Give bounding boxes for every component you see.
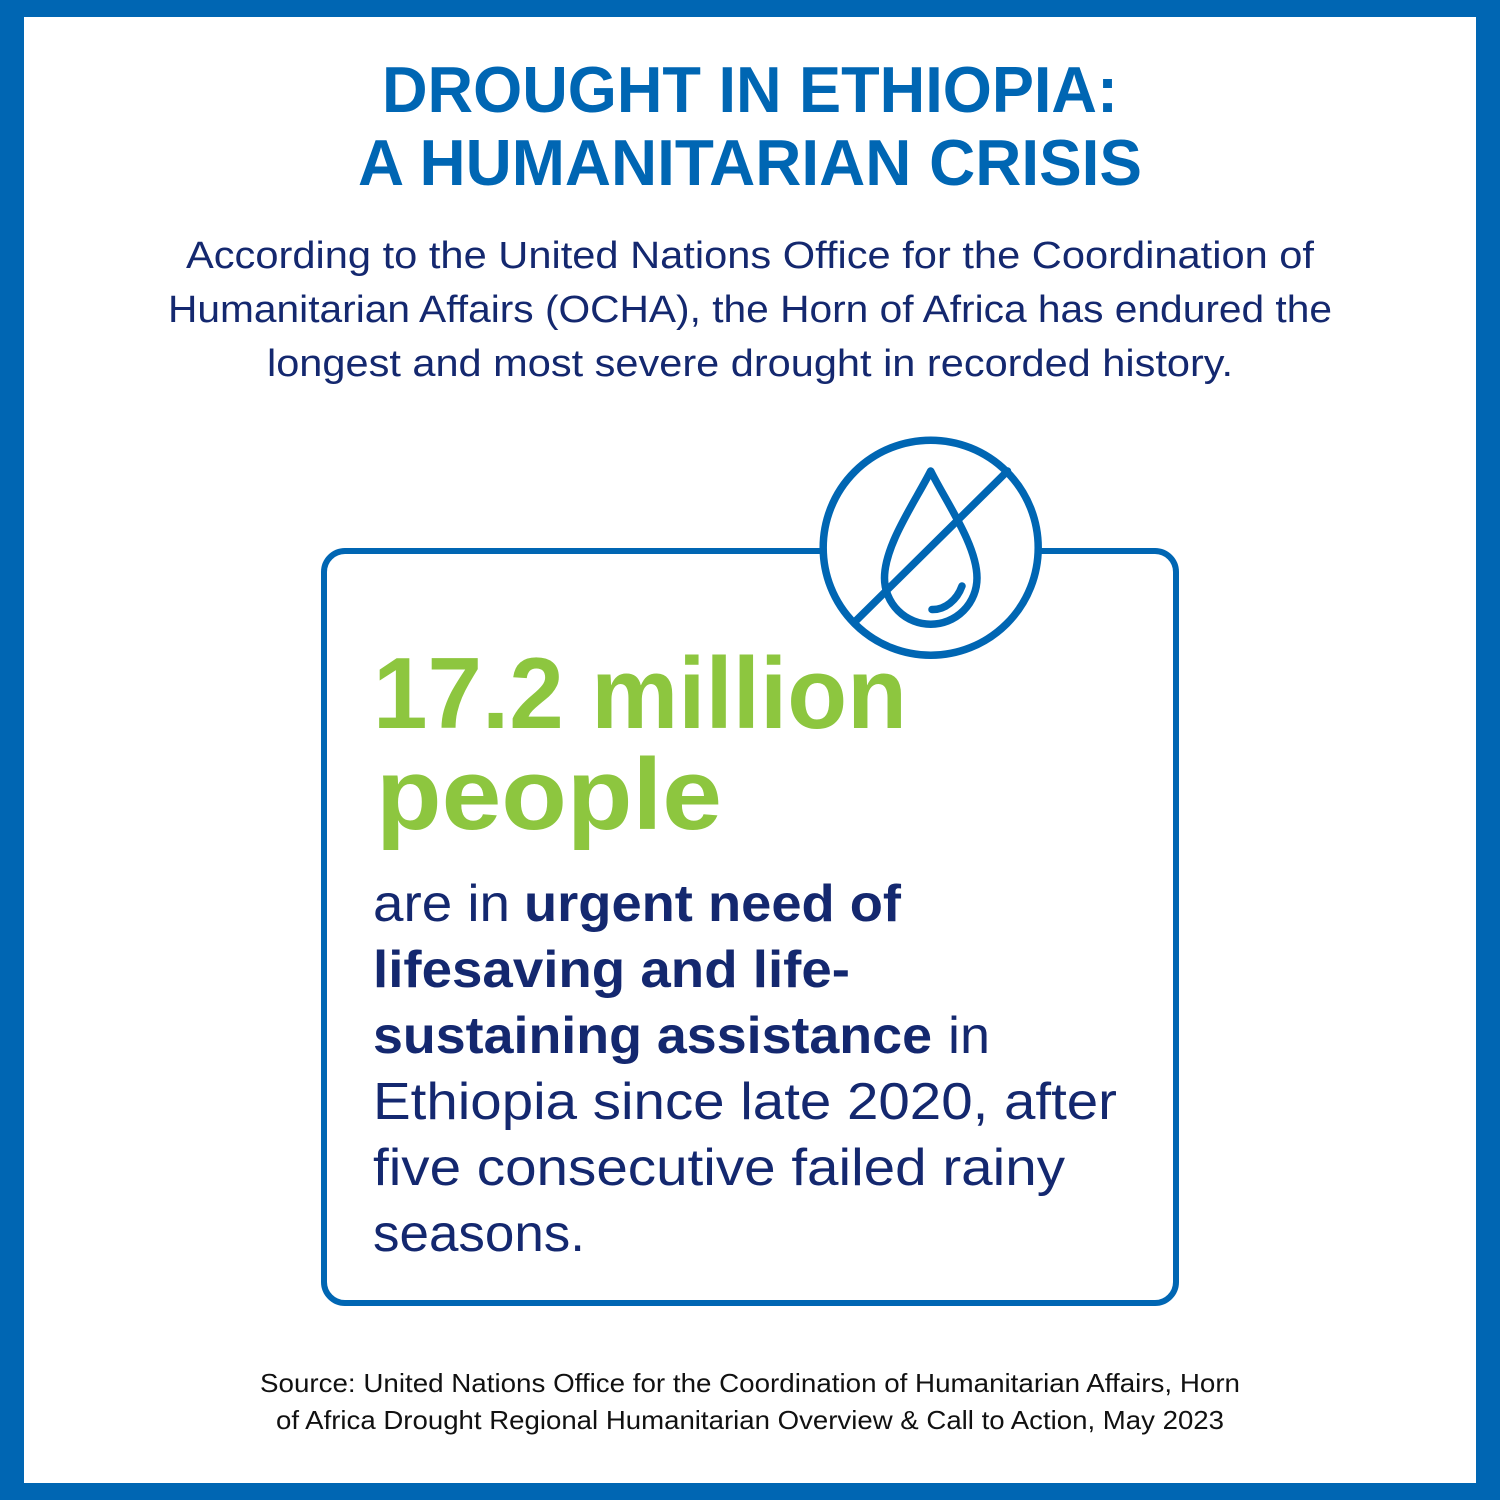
- statistic headline: [373, 638, 907, 851]
- source note: [260, 1368, 1240, 1435]
- statistic headline: people: [376, 739, 722, 851]
- intro text: longest and most severe drought in recorded history.: [267, 343, 1233, 385]
- statistic description: urgent need of: [524, 875, 902, 933]
- statistic description: lifesaving and life-: [373, 941, 850, 999]
- statistic headline: 17.2 million: [373, 638, 907, 750]
- statistic description: are in: [373, 875, 510, 933]
- statistic description: sustaining assistance: [373, 1007, 932, 1065]
- statistic description: in: [948, 1007, 990, 1065]
- title: A HUMANITARIAN CRISIS: [358, 126, 1142, 199]
- statistic description: five consecutive failed rainy: [373, 1139, 1065, 1197]
- panel: statistic card: [324, 551, 1176, 1303]
- title: DROUGHT IN ETHIOPIA:: [382, 53, 1118, 126]
- intro text: Humanitarian Affairs (OCHA), the Horn of Africa has endured the: [168, 289, 1332, 331]
- source note: of Africa Drought Regional Humanitarian Overview & Call to Action, May 2023: [276, 1405, 1224, 1435]
- statistic description: seasons.: [373, 1205, 585, 1263]
- title: [358, 53, 1142, 199]
- source note: Source: United Nations Office for the Coordination of Humanitarian Affairs, Horn: [260, 1368, 1240, 1398]
- statistic description: [373, 875, 1117, 1263]
- icon: crossed-out water drop: [823, 440, 1038, 655]
- intro text: According to the United Nations Office for the Coordination of: [186, 235, 1314, 277]
- intro text: [168, 235, 1332, 385]
- statistic description: Ethiopia since late 2020, after: [373, 1073, 1117, 1131]
